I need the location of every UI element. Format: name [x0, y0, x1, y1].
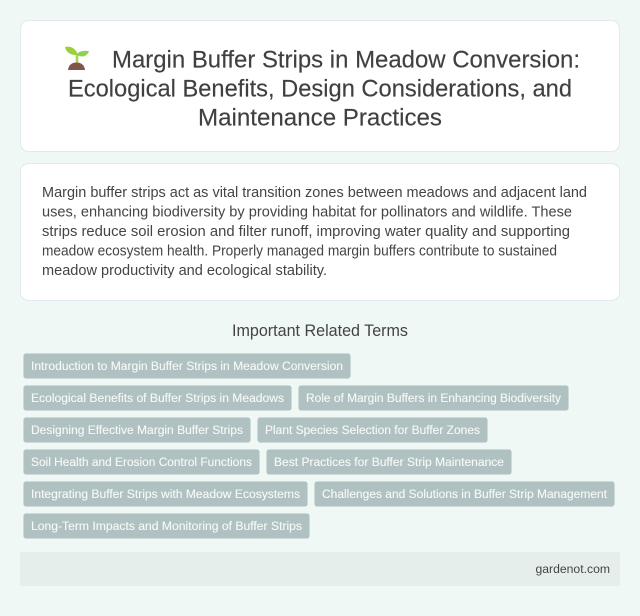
text block: description: meadow productivity and ecological stability.	[42, 263, 327, 279]
tag	[314, 482, 614, 506]
tag	[24, 418, 250, 442]
tag: Role of Margin Buffers in Enhancing Biodiversity	[306, 391, 562, 405]
tag: Introduction to Margin Buffer Strips in Meadow Conversion	[31, 359, 343, 373]
tag	[24, 482, 308, 506]
text block: description: strips reduce soil erosion and filter runoff, improving water quality and supporting	[42, 224, 570, 240]
title: Ecological Benefits, Design Considerations, and	[68, 76, 572, 102]
tag list	[24, 354, 614, 538]
text block: description: Margin buffer strips act as vital transition zones between meadows and adjacent land	[42, 185, 587, 201]
tag: Designing Effective Margin Buffer Strips	[31, 423, 243, 437]
tag: Plant Species Selection for Buffer Zones	[265, 423, 480, 437]
title	[68, 46, 580, 132]
panel: description	[20, 164, 620, 300]
tag	[24, 354, 350, 378]
tag	[24, 386, 292, 410]
tag: Long-Term Impacts and Monitoring of Buffer Strips	[31, 519, 302, 533]
title: Maintenance Practices	[198, 104, 442, 132]
panel: title card	[20, 20, 620, 152]
tag: Best Practices for Buffer Strip Maintenance	[274, 455, 504, 469]
tag: Soil Health and Erosion Control Functions	[31, 455, 252, 469]
tag	[24, 450, 260, 474]
text block: description: meadow ecosystem health. Properly managed margin buffers contribute to sustained	[42, 244, 557, 260]
text block: description: uses, enhancing biodiversity by providing habitat for pollinators and wildlife. These	[42, 204, 572, 220]
title: Margin Buffer Strips in Meadow Conversion:	[112, 46, 580, 74]
heading: related terms: Important Related Terms	[232, 322, 408, 340]
tag	[266, 450, 512, 474]
tag	[298, 386, 568, 410]
tag	[258, 418, 488, 442]
tag: Ecological Benefits of Buffer Strips in Meadows	[31, 391, 284, 405]
icon: sprout	[65, 47, 89, 70]
footer: gardenot.com	[536, 562, 610, 576]
text block: description	[42, 185, 587, 279]
footer	[20, 552, 620, 586]
tag: Integrating Buffer Strips with Meadow Ecosystems	[31, 487, 300, 501]
tag	[24, 514, 310, 538]
tag: Challenges and Solutions in Buffer Strip Management	[322, 487, 608, 501]
